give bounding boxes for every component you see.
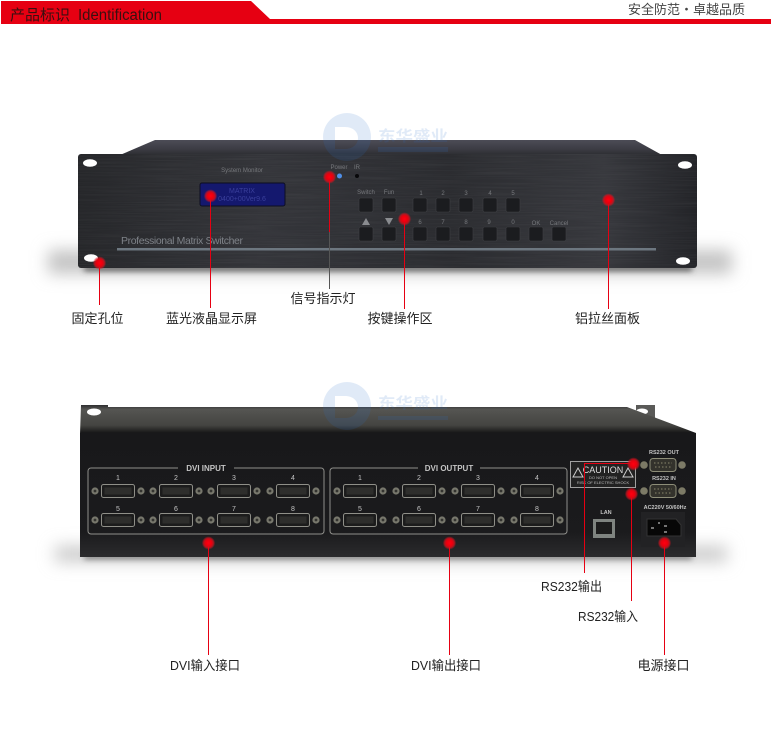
callout: signal indicator <box>290 170 356 306</box>
callout: DVI output <box>411 536 481 673</box>
DVI input group: 2 <box>174 475 178 482</box>
DVI output group <box>330 464 567 534</box>
RS232 ports: RS232 IN <box>652 476 676 482</box>
callout: blue LCD <box>166 190 257 326</box>
power socket: AC220V 50/60Hz <box>644 505 687 511</box>
DVI input group: 7 <box>232 506 236 513</box>
power and IR indicators <box>330 165 361 178</box>
panel: rear view of matrix switcher <box>55 405 727 562</box>
callout: DVI input: DVI输入接口 <box>170 658 240 673</box>
callout: RS232 input: RS232输入 <box>578 609 638 624</box>
caution label: RISK OF ELECTRIC SHOCK <box>577 480 629 485</box>
DVI output group: 1 <box>358 475 362 482</box>
keypad: 0 <box>511 220 515 226</box>
callout: power socket: 电源接口 <box>637 658 690 673</box>
rear floor shadow <box>55 546 727 562</box>
keypad: 6 <box>418 220 422 226</box>
keypad: 5 <box>511 191 515 197</box>
DVI output group: 7 <box>476 506 480 513</box>
rear body <box>80 433 696 557</box>
callout: brushed aluminium panel <box>575 194 640 326</box>
DVI output group: 3 <box>476 475 480 482</box>
DVI input group: 6 <box>174 506 178 513</box>
callout: mounting holes <box>71 256 124 326</box>
callout: signal indicator: 信号指示灯 <box>290 291 356 306</box>
callout: RS232 output: RS232输出 <box>541 579 602 594</box>
header title latin: Identification <box>78 7 162 24</box>
system monitor label: System Monitor <box>221 168 263 174</box>
caution label: DO NOT OPEN <box>589 475 617 480</box>
header slogan: 安全防范・卓越品质 <box>628 2 745 17</box>
floor shadow <box>48 250 732 274</box>
keypad: 4 <box>488 191 492 197</box>
callout: RS232 input <box>578 488 638 624</box>
panel: front view of matrix switcher <box>48 140 732 274</box>
DVI output group: DVI OUTPUT <box>425 464 473 473</box>
power and IR indicators: IR <box>354 165 361 171</box>
rear lid and ears <box>80 405 696 434</box>
DVI output group: 5 <box>358 506 362 513</box>
keypad <box>357 190 568 241</box>
DVI input group: 8 <box>291 506 295 513</box>
callout: brushed aluminium panel: 铝拉丝面板 <box>575 311 640 326</box>
front faceplate <box>78 154 697 268</box>
LAN port: LAN <box>600 510 612 516</box>
DVI output group: 8 <box>535 506 539 513</box>
keypad: Fun <box>384 190 394 196</box>
watermark bottom <box>323 382 448 430</box>
LCD screen: MATRIX <box>229 188 255 195</box>
LCD screen <box>200 183 285 206</box>
keypad: 3 <box>464 191 468 197</box>
product name: Professional Matrix Switcher <box>121 235 244 247</box>
top lid <box>120 140 662 155</box>
DVI input group: DVI INPUT <box>186 464 226 473</box>
callout: power socket <box>637 536 690 673</box>
callout: DVI input <box>170 536 240 673</box>
keypad: OK <box>532 221 540 227</box>
header red ribbon <box>1 1 771 24</box>
callout: RS232 output <box>541 458 640 594</box>
mounting holes <box>83 159 692 265</box>
silver stripe <box>117 248 656 250</box>
keypad: Switch <box>357 190 375 196</box>
watermark bottom: 东华盛业 <box>378 394 448 412</box>
DVI input group: 3 <box>232 475 236 482</box>
keypad: 2 <box>441 191 445 197</box>
callout: mounting holes: 固定孔位 <box>71 311 124 326</box>
callout: keypad area: 按键操作区 <box>367 311 433 326</box>
watermark top <box>323 113 448 161</box>
RS232 ports <box>640 450 686 498</box>
keypad: 9 <box>487 220 491 226</box>
DVI input group: 1 <box>116 475 120 482</box>
header bar <box>1 1 771 24</box>
DVI input group: 5 <box>116 506 120 513</box>
DVI output group: 4 <box>535 475 539 482</box>
RS232 ports: RS232 OUT <box>649 450 680 456</box>
power and IR indicators: Power <box>330 165 348 171</box>
callout: blue LCD: 蓝光液晶显示屏 <box>166 311 257 326</box>
keypad: 7 <box>441 220 445 226</box>
callout: DVI output: DVI输出接口 <box>411 658 481 673</box>
caution label <box>570 462 636 488</box>
keypad: Cancel <box>550 221 568 227</box>
header title: 产品标识 <box>10 7 70 24</box>
caution label: CAUTION <box>583 465 623 475</box>
keypad: 1 <box>419 191 423 197</box>
DVI input group: 4 <box>291 475 295 482</box>
callout: keypad area <box>367 212 433 326</box>
DVI input group <box>88 464 324 534</box>
DVI output group: 6 <box>417 506 421 513</box>
power socket <box>641 505 687 547</box>
DVI output group: 2 <box>417 475 421 482</box>
LCD screen: 0400+00Ver9.6 <box>218 196 266 203</box>
keypad: 8 <box>464 220 468 226</box>
LAN port <box>593 510 615 538</box>
watermark top: 东华盛业 <box>378 127 448 145</box>
